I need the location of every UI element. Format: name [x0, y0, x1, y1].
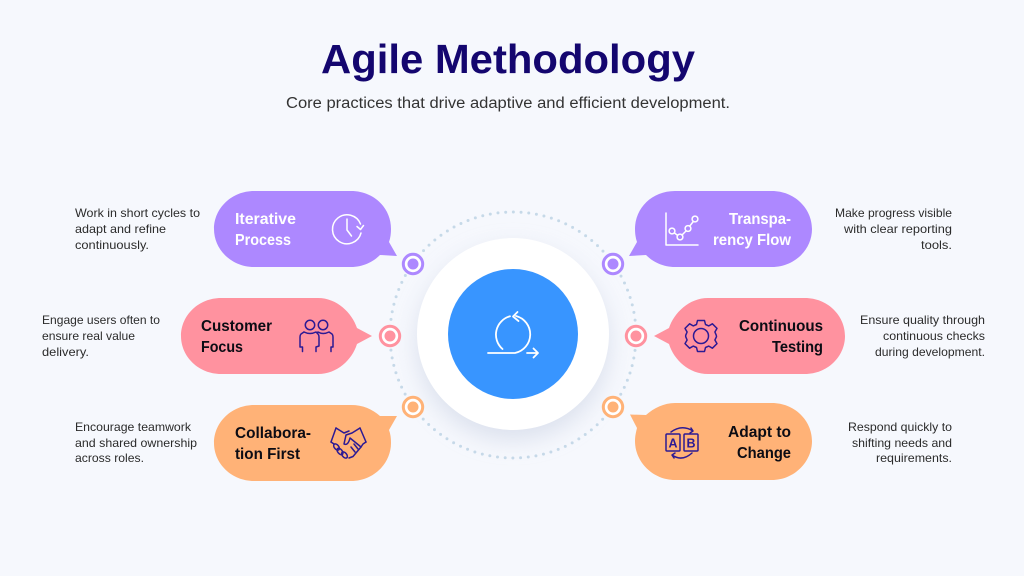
panel: customer focus: Customer: [201, 318, 272, 335]
text: collaboration first: across roles.: [75, 451, 144, 465]
panel: adapt to change: Change: [737, 445, 791, 462]
text: customer focus: [42, 313, 160, 359]
panel: transparency flow: [629, 191, 812, 267]
node: customer focus: [380, 326, 400, 346]
icon: A/B swap: B: [686, 436, 696, 450]
panel: customer focus: Focus: [201, 339, 243, 356]
text: continuous testing: during development.: [875, 345, 985, 359]
node: adapt to change: [603, 397, 623, 417]
text: transparency flow: [835, 206, 952, 252]
title: Agile Methodology: [321, 36, 695, 82]
central hub: [417, 238, 609, 440]
text: iterative process: Work in short cycles to: [75, 206, 200, 220]
node: continuous testing: [626, 326, 646, 346]
panel: continuous testing: [654, 298, 845, 374]
text: iterative process: [75, 206, 200, 252]
panel: collaboration first: tion First: [235, 446, 301, 463]
icon: A/B swap: A: [668, 436, 678, 450]
subtitle: Core practices that drive adaptive and efficient development.: [286, 95, 730, 112]
panel: transparency flow: rency Flow: [713, 232, 792, 249]
text: continuous testing: [860, 313, 985, 359]
text: transparency flow: tools.: [921, 238, 952, 252]
text: adapt to change: Respond quickly to: [848, 420, 952, 434]
text: adapt to change: requirements.: [876, 451, 952, 465]
icon: line chart: [666, 213, 698, 245]
icon: two people: [300, 320, 333, 352]
icon: handshake: [331, 428, 366, 459]
text: collaboration first: Encourage teamwork: [75, 420, 191, 434]
text: iterative process: continuously.: [75, 238, 149, 252]
text: continuous testing: Ensure quality through: [860, 313, 985, 327]
panel: adapt to change: Adapt to: [728, 424, 791, 441]
panel: iterative process: [214, 191, 397, 267]
text: transparency flow: Make progress visible: [835, 206, 952, 220]
panel: transparency flow: Transpa-: [729, 211, 791, 228]
panel: iterative process: Iterative: [235, 211, 296, 228]
dotted ring: [390, 212, 636, 458]
text: customer focus: ensure real value: [42, 329, 135, 343]
panel: collaboration first: [214, 405, 397, 481]
text: adapt to change: shifting needs and: [852, 436, 952, 450]
icon: gear: [685, 320, 717, 352]
text: iterative process: adapt and refine: [75, 222, 166, 236]
panel: customer focus: [181, 298, 372, 374]
icon: agile loop: [488, 312, 538, 358]
node: iterative process: [403, 254, 423, 274]
text: transparency flow: with clear reporting: [843, 222, 952, 236]
text: customer focus: Engage users often to: [42, 313, 160, 327]
panel: adapt to change: [630, 403, 812, 480]
text: collaboration first: [75, 420, 197, 465]
node: collaboration first: [403, 397, 423, 417]
icon: clock: [332, 215, 364, 244]
panel: collaboration first: Collabora-: [235, 425, 311, 442]
icon: A/B swap: [666, 428, 698, 458]
node: transparency flow: [603, 254, 623, 274]
text: adapt to change: [848, 420, 952, 465]
panel: iterative process: Process: [235, 232, 291, 249]
text: customer focus: delivery.: [42, 345, 89, 359]
panel: continuous testing: Testing: [772, 339, 823, 356]
text: collaboration first: and shared ownership: [75, 436, 197, 450]
panel: continuous testing: Continuous: [739, 318, 823, 335]
text: continuous testing: continuous checks: [883, 329, 985, 343]
